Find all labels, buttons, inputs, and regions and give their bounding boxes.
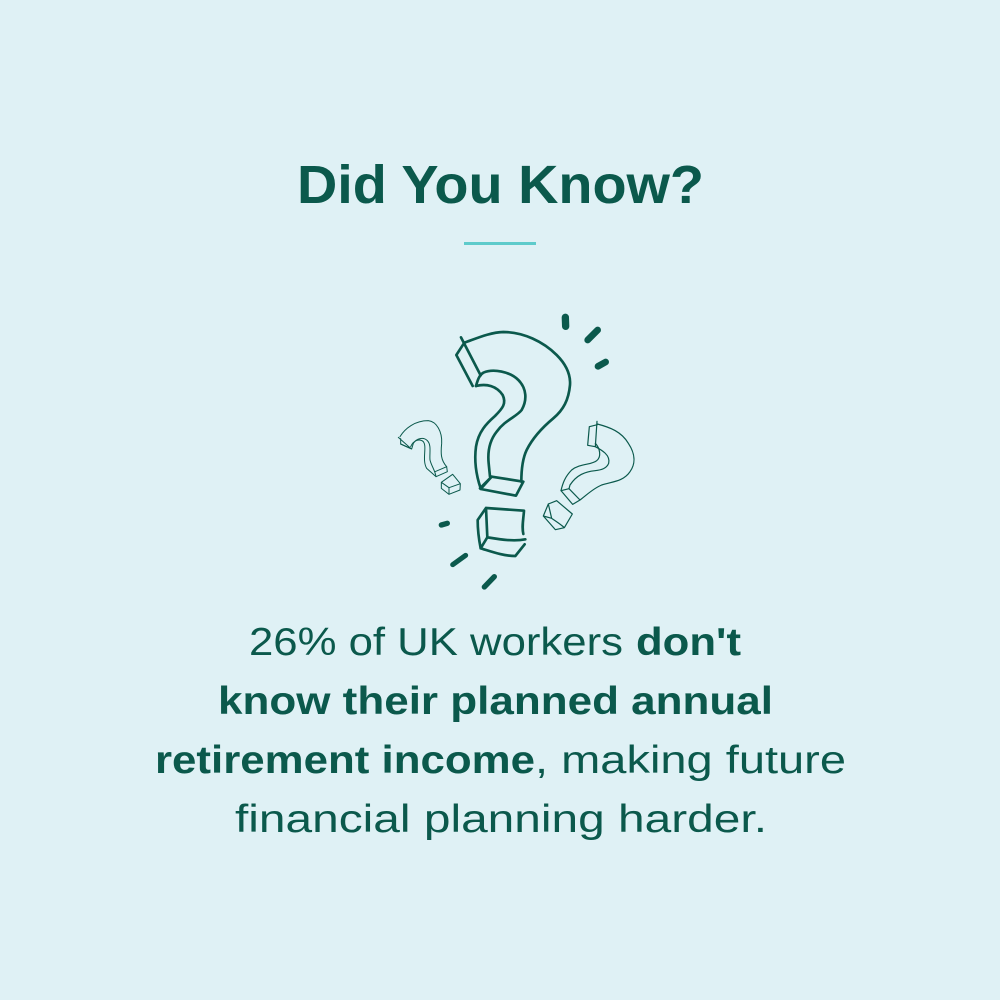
icon: emphasis dashes xyxy=(441,317,606,587)
line 4: financial planning harder. xyxy=(235,798,767,841)
line 3 xyxy=(155,739,846,782)
line 1: don't xyxy=(636,621,741,664)
icon: left small question mark xyxy=(398,421,460,494)
icon: large question mark xyxy=(456,332,570,556)
title: Did You Know? xyxy=(297,155,704,215)
line 3: , making future xyxy=(535,739,846,782)
line 1 xyxy=(249,621,741,664)
body text xyxy=(155,621,846,841)
illustration: question marks xyxy=(398,317,634,587)
line 1: 26% of UK workers xyxy=(249,621,623,664)
line 3: retirement income xyxy=(155,739,535,782)
title underline xyxy=(464,242,536,245)
icon: right small question mark xyxy=(543,421,634,530)
line 2: know their planned annual xyxy=(218,680,773,723)
